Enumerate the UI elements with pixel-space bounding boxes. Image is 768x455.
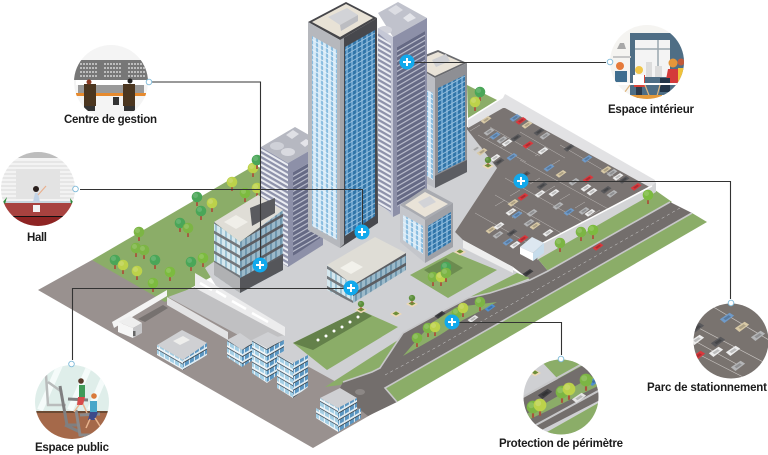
illustration: gym	[35, 365, 109, 440]
plaza planters	[187, 157, 494, 336]
marker: interior	[400, 54, 414, 70]
callout: Espace public	[35, 361, 110, 454]
wall: parking front	[537, 182, 656, 260]
illustration: office	[610, 25, 686, 99]
illustration: parking close-up	[690, 303, 768, 379]
ring	[73, 186, 78, 192]
label: Hall	[27, 232, 47, 244]
ring	[558, 356, 564, 362]
lawn: central shade	[424, 258, 463, 281]
ring	[728, 300, 734, 306]
lawn: flag garden	[293, 310, 398, 370]
roundabout	[355, 389, 365, 395]
building J	[252, 332, 284, 383]
building E	[214, 195, 283, 293]
building F	[327, 237, 406, 303]
tower A	[308, 2, 378, 248]
label: Espace intérieur	[608, 104, 695, 116]
road-side trees	[412, 190, 653, 347]
label: Parc de stationnement	[647, 382, 767, 394]
lawn: south-east strip	[385, 213, 707, 402]
building H	[157, 330, 207, 370]
road cars	[434, 243, 604, 323]
lawn: entrance triangle	[468, 273, 530, 298]
marker: perimeter	[444, 314, 460, 330]
gate house	[520, 237, 544, 261]
tower B	[378, 2, 427, 217]
grass: parking verge	[537, 190, 672, 271]
plaza	[205, 112, 530, 384]
lawn: behind tower	[467, 85, 497, 118]
lawn: north-west garden	[92, 165, 330, 302]
callout: Espace intérieur	[607, 25, 695, 116]
label: Centre de gestion	[64, 114, 157, 126]
garden trees	[110, 87, 485, 292]
callout: Centre de gestion	[64, 45, 157, 126]
illustration: road close-up	[524, 360, 598, 434]
flag poles	[316, 316, 360, 342]
parked cars	[470, 114, 642, 249]
building L	[316, 388, 361, 432]
marker: public space	[344, 280, 358, 296]
road curbs	[343, 202, 692, 402]
connector lines	[72, 62, 730, 360]
wall: entrance	[463, 240, 513, 273]
guard house	[118, 316, 142, 338]
label: Espace public	[35, 442, 110, 454]
ring	[146, 79, 152, 85]
wall: courtyard back	[195, 273, 285, 336]
parking surface	[455, 104, 650, 280]
callout: Parc de stationnement	[647, 300, 768, 394]
road centre dashes	[385, 208, 680, 375]
ground: concrete base	[38, 260, 405, 448]
parking lot markings	[470, 125, 620, 247]
building I	[227, 333, 253, 367]
tower D	[261, 127, 323, 267]
illustration: lobby	[0, 152, 76, 227]
wall: parking front top	[543, 186, 652, 243]
label: Protection de périmètre	[499, 438, 623, 450]
marker: hall	[354, 224, 370, 240]
wall: courtyard front	[167, 297, 228, 340]
lawn: central	[410, 252, 497, 298]
wall: parking back	[468, 94, 655, 190]
building K	[277, 347, 308, 398]
lawn: flag garden shade	[293, 310, 372, 350]
callout: Protection de périmètre	[499, 354, 623, 450]
illustration: control room	[74, 45, 148, 119]
tower C	[407, 50, 467, 188]
ring	[607, 59, 613, 65]
wall: to gatehouse	[112, 290, 167, 328]
tower G	[400, 188, 453, 263]
marker: parking	[514, 174, 528, 188]
callout: Hall	[0, 152, 78, 244]
wall: inner shadow	[138, 305, 168, 322]
hotspot markers	[252, 54, 528, 330]
ring	[69, 361, 74, 367]
lawn: roadside	[325, 340, 398, 387]
marker: management centre	[252, 258, 268, 272]
road with cul-de-sac	[338, 202, 692, 416]
courtyard	[168, 287, 285, 343]
road median	[403, 302, 497, 356]
